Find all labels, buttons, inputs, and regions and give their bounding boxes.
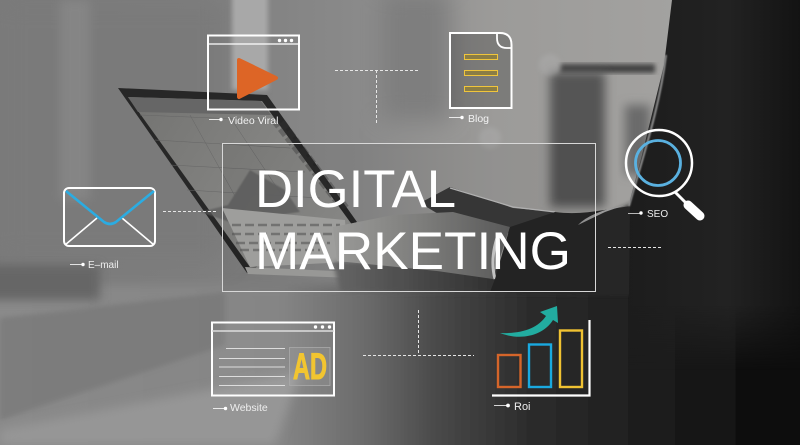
icon: website ad window [212, 322, 334, 396]
icon: SEO magnifier [626, 130, 700, 217]
label: SEO [628, 209, 668, 220]
ad text: AD [293, 346, 327, 387]
label: blog [449, 113, 489, 125]
label: e-mail: E–mail [88, 260, 119, 271]
connector lines [163, 70, 662, 356]
title: MARKETING: MARKETING [255, 222, 571, 281]
icon: blog document [450, 33, 512, 108]
label: blog: Blog [468, 113, 489, 125]
label: website [213, 402, 268, 414]
label: roi: Roi [514, 401, 531, 413]
label: website: Website [230, 402, 268, 414]
label: e-mail [70, 260, 119, 271]
icon: ROI bar chart [492, 306, 590, 396]
label: SEO: SEO [647, 209, 668, 220]
title: DIGITAL: DIGITAL [255, 160, 456, 219]
title box [222, 144, 596, 292]
person: hands and arm [333, 187, 660, 295]
label: video viral: Video Viral [228, 115, 278, 127]
laptop [118, 88, 467, 281]
icon: email envelope [64, 188, 155, 246]
label: roi [494, 401, 531, 413]
person: torso [628, 0, 800, 375]
icon: video viral [208, 36, 299, 110]
